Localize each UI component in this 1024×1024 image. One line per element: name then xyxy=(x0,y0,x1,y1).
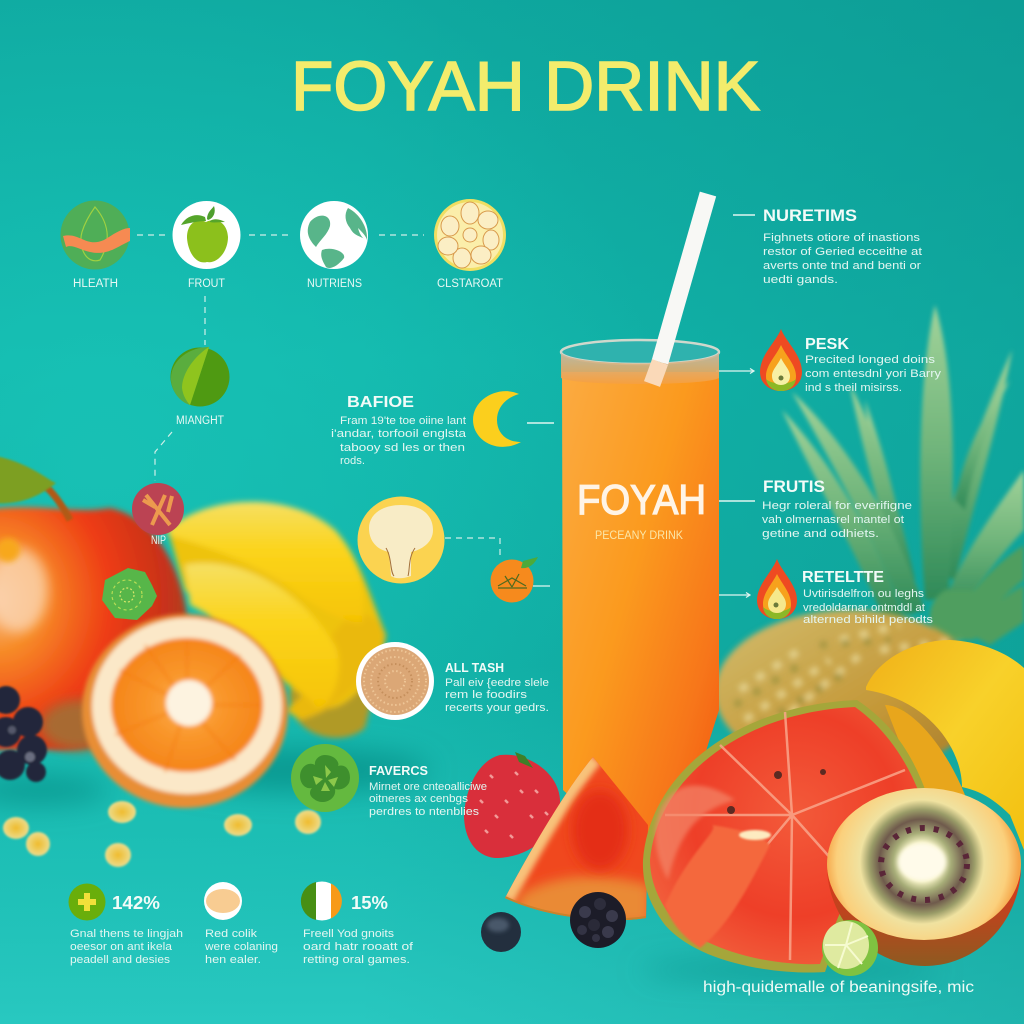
stat: 15% xyxy=(301,882,414,966)
pineapple leaves xyxy=(782,305,1024,622)
label: nutrients: NUTRIENS xyxy=(307,278,362,290)
pineapple xyxy=(715,305,1024,774)
shadow under fruits xyxy=(0,748,940,978)
stat: red colik: were colaning xyxy=(204,941,278,953)
text: all tash: Pall eiv {eedre slele xyxy=(445,677,549,689)
label: health: HLEATH xyxy=(73,278,118,290)
text: favercs: FAVERCS xyxy=(369,763,428,778)
right panel: pesk: PESK xyxy=(805,336,849,353)
icon: clover xyxy=(291,744,359,812)
left text: bafioe: Fram 19'te toe oiine lant xyxy=(340,415,466,427)
bananas xyxy=(168,502,386,738)
text: all tash: rem le foodirs xyxy=(445,689,528,701)
icon: grain bowl xyxy=(356,642,434,720)
apple xyxy=(0,455,188,750)
kiwi xyxy=(827,788,1021,966)
straw xyxy=(660,194,708,362)
big grapefruit xyxy=(643,700,927,972)
right panel: nutrients text xyxy=(733,207,922,286)
text: all tash: ALL TASH xyxy=(445,660,504,675)
text: favercs: oitneres ax cenbgs xyxy=(369,793,469,805)
icon: root wheat xyxy=(132,483,184,535)
stat: 15%: Freell Yod gnoits xyxy=(303,928,395,940)
right panel: nutrients text: averts onte tnd and benti or xyxy=(763,260,921,272)
right panel: fruits text: Hegr roleral for everifigne xyxy=(762,500,912,512)
stat: 142% xyxy=(68,884,183,966)
left text: bafioe: i'andar, torfooil englsta xyxy=(331,428,467,440)
text: favercs: perdres to ntenblies xyxy=(369,806,480,818)
icon: fruit apple xyxy=(172,201,240,269)
strawberry xyxy=(464,752,560,858)
seeds xyxy=(3,801,321,867)
title: FOYAH DRINK xyxy=(291,47,760,125)
icon: mushroom circle xyxy=(358,496,444,584)
glass label: FOYAH xyxy=(577,476,706,523)
icon: leaf mianght xyxy=(170,347,230,406)
blackberries xyxy=(0,686,47,782)
right panel: retelte: RETELTTE xyxy=(802,569,884,586)
right panel: fruits text xyxy=(710,478,912,540)
pineapple body xyxy=(715,610,985,774)
label: fruit: FROUT xyxy=(188,278,225,290)
text: all tash xyxy=(445,660,549,714)
right panel: nutrients text: NURETIMS xyxy=(763,207,857,225)
watermelon slice xyxy=(505,757,650,925)
halved orange xyxy=(82,614,288,808)
icon: crescent moon xyxy=(473,391,521,447)
juice xyxy=(562,372,719,860)
blackberry xyxy=(570,892,626,948)
left text: bafioe: tabooy sd les or then xyxy=(340,442,465,454)
right panel: nutrients text: uedti gands. xyxy=(763,274,838,286)
footer caption: high-quidemalle of beaningsife, mic xyxy=(703,979,974,996)
stat: 142%: peadell and desies xyxy=(70,954,171,966)
stat: red colik: hen ealer. xyxy=(205,954,261,966)
lighter lower-left segment xyxy=(665,825,770,948)
stat: 142%: Gnal thens te lingjah xyxy=(70,928,183,940)
lime xyxy=(822,920,878,976)
glass of juice xyxy=(561,194,719,860)
label: nip: NIP xyxy=(151,535,166,547)
icon: flame xyxy=(757,559,797,619)
icon: plus xyxy=(68,884,106,920)
stat: 142%: 142% xyxy=(112,893,160,913)
right panel: pesk: ind s theil misirss. xyxy=(805,382,902,394)
stat: 15%: oard hatr rooatt of xyxy=(303,941,414,953)
stat: 142%: oeesor on ant ikela xyxy=(70,941,173,953)
right panel: nutrients text: restor of Geried ecceithe at xyxy=(763,246,922,258)
left text: bafioe xyxy=(331,394,467,467)
icon: tricolor circle xyxy=(301,882,342,920)
label: clstaroat: CLSTAROAT xyxy=(437,278,503,290)
text: all tash: recerts your gedrs. xyxy=(445,702,549,714)
glass label xyxy=(577,476,706,542)
right panel: pesk xyxy=(716,329,942,394)
right panel: pesk: com entesdnl yori Barry xyxy=(805,368,942,380)
text: favercs: Mirnet ore cnteoalliciwe xyxy=(369,781,487,793)
icon: globe xyxy=(300,201,368,269)
left blurred fruits xyxy=(0,455,386,808)
stat: red colik: Red colik xyxy=(205,928,258,940)
stat: 15%: 15% xyxy=(351,893,388,913)
right panel: pesk: Precited longed doins xyxy=(805,354,936,366)
left text: bafioe: BAFIOE xyxy=(347,394,414,411)
right panel: retelte xyxy=(708,559,934,626)
right panel: fruits text: vah olmernasrel mantel ot xyxy=(762,514,904,526)
right panel: fruits text: FRUTIS xyxy=(763,478,825,496)
right panel: retelte: Uvtirisdelfron ou leghs xyxy=(803,588,925,600)
icon: flower circle xyxy=(434,199,506,271)
text: favercs xyxy=(369,763,487,818)
glass label: PECEANY DRINK xyxy=(595,530,683,542)
icon: flame xyxy=(760,329,802,391)
left text: bafioe: rods. xyxy=(340,455,365,467)
icon: egg xyxy=(204,882,242,920)
stat: red colik xyxy=(204,882,278,966)
icon: health xyxy=(60,200,130,270)
right panel: retelte: alterned bihild perodts xyxy=(803,614,934,626)
icon: small orange xyxy=(490,557,538,602)
right panel: retelte: vredoldarnar ontmddl at xyxy=(803,602,925,614)
right banana xyxy=(866,640,1024,850)
stat: 15%: retting oral games. xyxy=(303,954,410,966)
connector flow dashed lines xyxy=(137,235,500,560)
glass rim xyxy=(561,340,719,364)
icon: lime segment xyxy=(102,568,157,620)
right panel: nutrients text: Fighnets otiore of inastions xyxy=(763,232,921,244)
right panel: fruits text: getine and odhiets. xyxy=(762,528,879,540)
blueberry xyxy=(481,912,521,952)
label: mianght: MIANGHT xyxy=(176,415,224,427)
